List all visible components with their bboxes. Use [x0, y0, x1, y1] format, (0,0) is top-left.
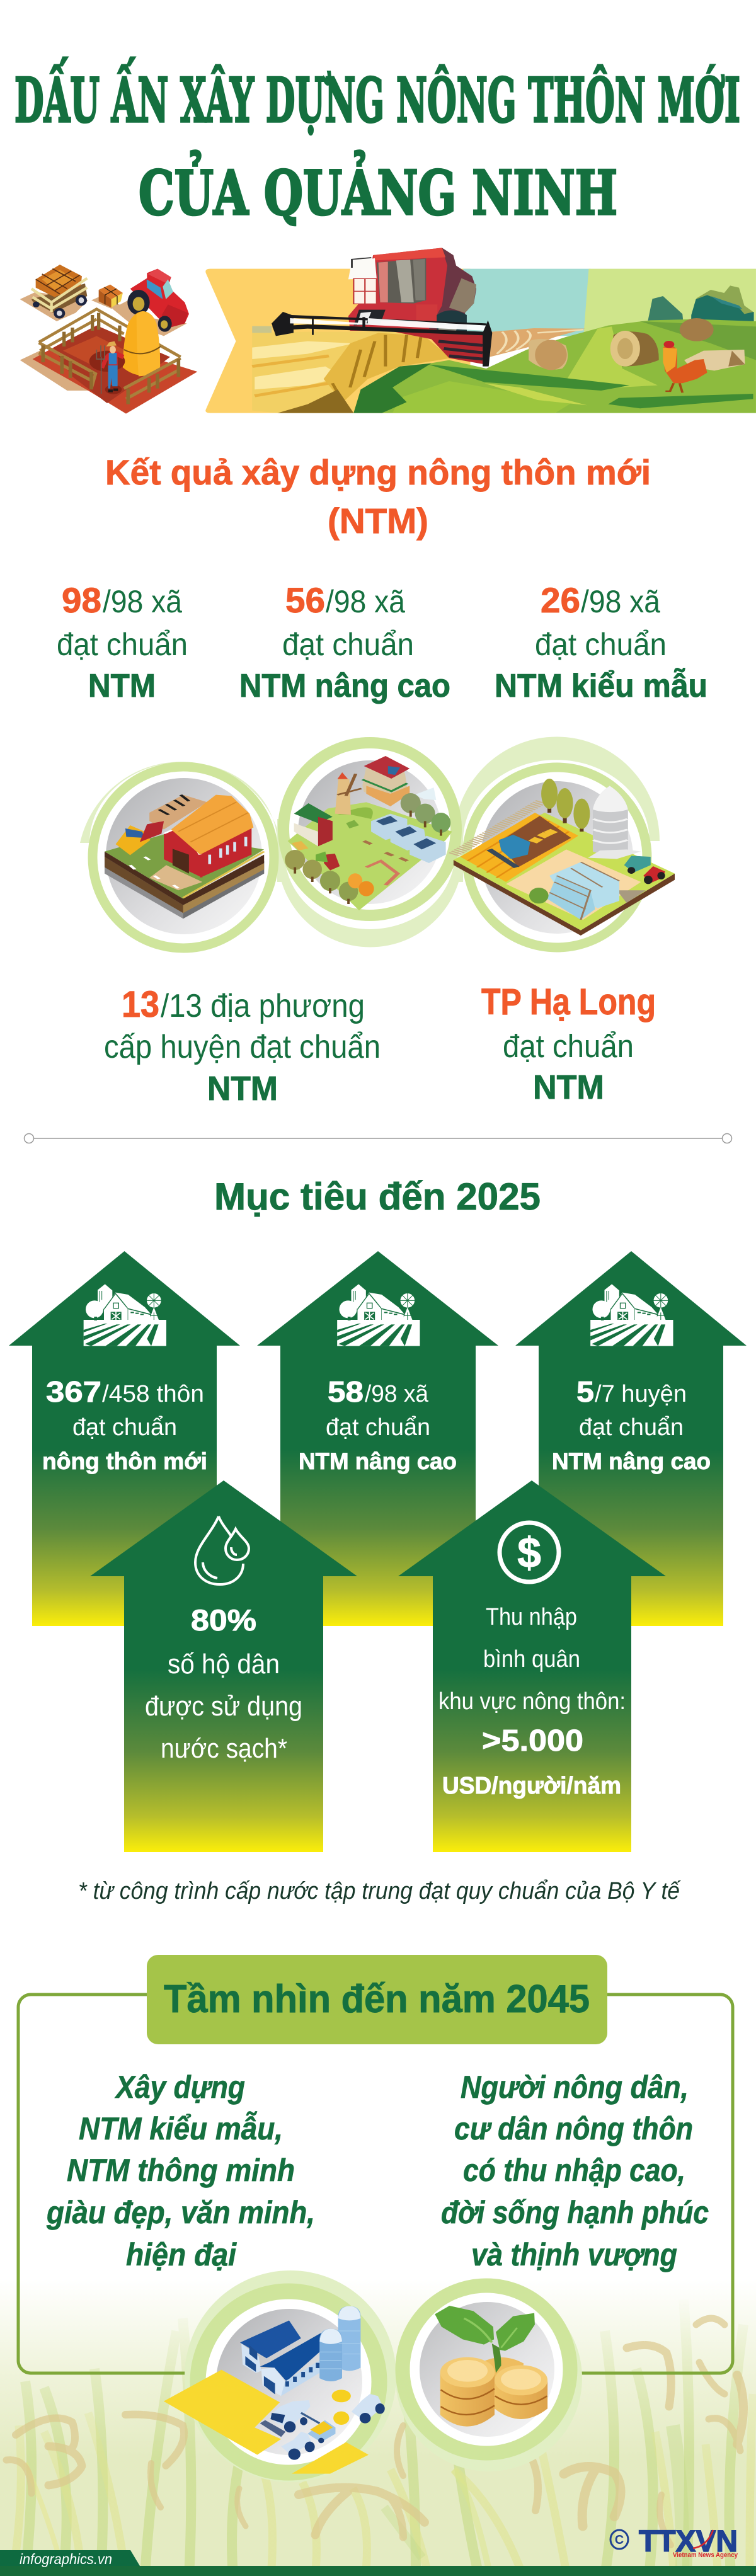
arrow: 5/7 huyện: đạt chuẩn [579, 1414, 684, 1441]
rice heads [6, 2318, 743, 2545]
arrow: 58/98 xã: đạt chuẩn [326, 1414, 430, 1441]
heading: results: Kết quả xây dựng nông thôn mới [105, 452, 651, 492]
text: vision left: giàu đẹp, văn minh, [46, 2195, 315, 2230]
stat: 98/98 xã: đạt chuẩn [57, 627, 188, 662]
hay bales [529, 339, 568, 370]
hay box [99, 285, 123, 299]
text: vision left: hiện đại [126, 2237, 237, 2272]
stat: 26/98 xã: 26 [541, 580, 580, 620]
stat: 26/98 xã: NTM kiểu mẫu [495, 668, 707, 704]
stat: 98/98 xã: NTM [88, 668, 156, 704]
stat: 26/98 xã: /98 xã [581, 584, 660, 619]
footnote: * từ công trình cấp nước tập trung đạt quy chuẩn của Bộ Y tế [78, 1878, 682, 1904]
stat: 26/98 xã: đạt chuẩn [535, 627, 667, 662]
arrow: income: khu vực nông thôn: [438, 1688, 626, 1715]
arrow: 5/7 huyện: /7 huyện [595, 1381, 687, 1407]
arrow: 367/458 thôn [9, 1251, 240, 1626]
icon: dollar coin [500, 1523, 559, 1582]
arrow: 367/458 thôn: đạt chuẩn [72, 1414, 177, 1441]
arrow: 5/7 huyện: NTM nâng cao [552, 1448, 711, 1474]
background: rice field [0, 2281, 756, 2576]
heading: results: (NTM) [328, 501, 428, 541]
hills [353, 319, 756, 413]
stat: 26/98 xã [495, 580, 707, 704]
text: vision right: và thịnh vượng [471, 2237, 677, 2272]
logo: TTXVN: TTXVN [639, 2525, 738, 2558]
fence back [39, 309, 181, 357]
stat: 56/98 xã: đạt chuẩn [282, 627, 414, 662]
hay stack [123, 311, 160, 375]
stat: 56/98 xã [239, 580, 450, 704]
coins and sprout [435, 2306, 547, 2427]
arrow: income: Thu nhập [486, 1604, 577, 1630]
arrow: income: bình quân [483, 1646, 580, 1673]
hay cart [32, 283, 87, 313]
text: vision left [46, 2069, 315, 2272]
illustration: farmyard with tractor and cart [20, 265, 197, 414]
stubble [490, 328, 585, 357]
arrow: 58/98 xã: /98 xã [365, 1381, 429, 1407]
stat: 56/98 xã: 56 [285, 580, 325, 620]
icon: water drops [195, 1516, 249, 1584]
arrow: 58/98 xã: 58 [328, 1375, 364, 1408]
arrow: 367/458 thôn: 367 [46, 1375, 101, 1408]
arrow: 367/458 thôn: nông thôn mới [42, 1448, 207, 1474]
arrow: 5/7 huyện: 5 [576, 1375, 594, 1408]
isometric barn [105, 795, 264, 919]
arrow: 80% clean water: 80% [191, 1603, 256, 1637]
text: vision right: Người nông dân, [461, 2069, 689, 2105]
wheat [252, 332, 451, 413]
lower result: 13/13: cấp huyện đạt chuẩn [104, 1029, 381, 1065]
title [14, 58, 740, 229]
lower result: 13/13 [104, 984, 381, 1108]
lower result: TP Hạ Long: đạt chuẩn [503, 1028, 634, 1064]
farm scene [164, 2306, 385, 2474]
arrow: 80% clean water: số hộ dân [168, 1649, 280, 1680]
arrow: 367/458 thôn: /458 thôn [102, 1381, 204, 1407]
arrow: 80% clean water: nước sạch* [161, 1733, 287, 1764]
circle backgrounds [80, 736, 660, 948]
fence front [39, 343, 181, 399]
text: vision left: NTM kiểu mẫu, [79, 2111, 283, 2146]
arrow: 5/7 huyện [515, 1251, 747, 1626]
footer bar: infographics.vn [20, 2551, 112, 2567]
distant trees [648, 285, 754, 321]
lower result: 13/13: 13 [122, 984, 159, 1025]
logo: TTXVN: Vietnam News Agency [673, 2551, 738, 2559]
icon: dollar coin: $ [517, 1529, 541, 1577]
text: vision left: NTM thông minh [67, 2153, 295, 2188]
arrow: 80% clean water [90, 1480, 357, 1852]
stat: 98/98 xã: 98 [62, 580, 101, 620]
combine harvester [272, 248, 492, 367]
text: vision right: có thu nhập cao, [463, 2153, 685, 2188]
lower result: TP Hạ Long: NTM [533, 1068, 604, 1106]
lower result: TP Hạ Long: TP Hạ Long [481, 982, 656, 1022]
isometric greenhouse farm [454, 779, 675, 936]
stat: 56/98 xã: /98 xã [326, 584, 405, 619]
arrow: income [398, 1480, 666, 1852]
stat: 98/98 xã [57, 580, 188, 704]
heading: results [105, 452, 651, 541]
lower result: 13/13: NTM [207, 1070, 278, 1108]
arrow: income: USD/người/năm [442, 1773, 621, 1799]
arrow: 58/98 xã [257, 1251, 498, 1626]
text: vision left: Xây dựng [114, 2069, 245, 2105]
arrow: 80% clean water: được sử dụng [145, 1691, 302, 1722]
rooster [663, 341, 707, 392]
logo: TTXVN: C [615, 2533, 624, 2547]
stat: 98/98 xã: /98 xã [103, 584, 182, 619]
farmer [89, 341, 125, 394]
lower result: 13/13: /13 địa phương [161, 988, 365, 1024]
text: vision right [441, 2069, 709, 2272]
illustration: coins and sprout circle [396, 2285, 582, 2471]
heading: vision to 2045 [147, 1955, 607, 2044]
arrow: 58/98 xã: NTM nâng cao [299, 1448, 457, 1474]
panel: vision frame [18, 1995, 733, 2373]
illustration: three farm circles [80, 736, 675, 948]
heading: goals to 2025: Mục tiêu đến 2025 [214, 1176, 541, 1218]
isometric smart village [285, 756, 452, 910]
heading: vision to 2045: Tầm nhìn đến năm 2045 [164, 1978, 590, 2021]
footer bar [0, 2550, 756, 2576]
illustration: blue farm circle [164, 2270, 396, 2482]
stat: 56/98 xã: NTM nâng cao [239, 668, 450, 704]
tractor [130, 269, 189, 328]
lower result: TP Hạ Long [481, 982, 656, 1106]
illustration: harvest banner [205, 248, 756, 413]
arrow: income: >5.000 [482, 1724, 583, 1758]
text: vision right: đời sống hạnh phúc [441, 2195, 709, 2230]
text: vision right: cư dân nông thôn [454, 2111, 693, 2146]
